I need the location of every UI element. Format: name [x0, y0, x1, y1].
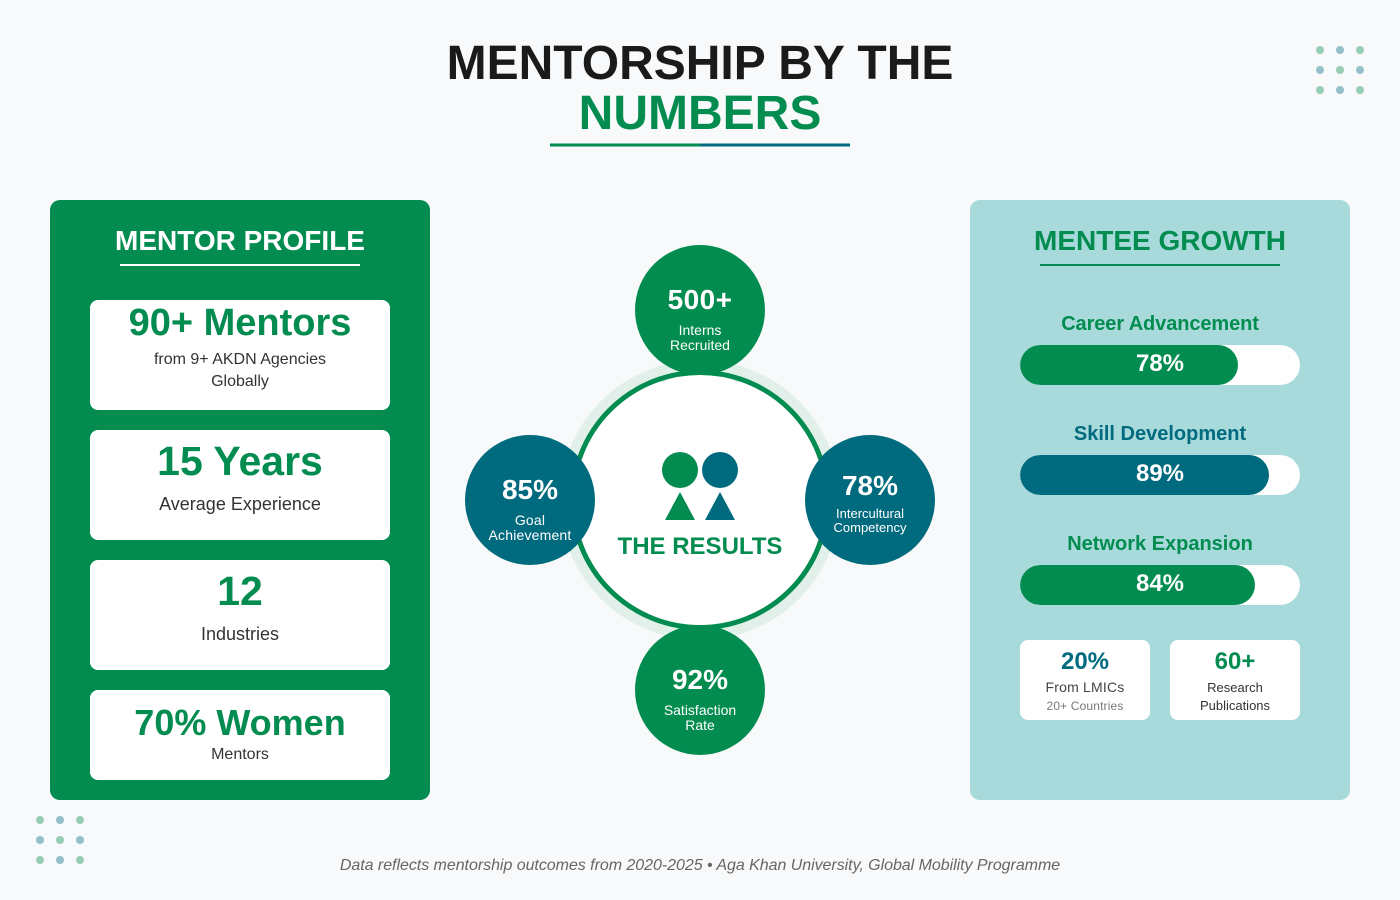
title underline — [550, 144, 850, 146]
mini description: Publications — [1200, 698, 1270, 713]
bar value: 78% — [1136, 350, 1184, 377]
metric: satisfaction — [635, 625, 765, 755]
stat card: years — [90, 430, 390, 540]
stat value: 15 Years — [157, 438, 323, 484]
mini card: research — [1170, 640, 1300, 720]
bar fill — [1020, 565, 1255, 605]
bar label: network expansion: Network Expansion — [1067, 533, 1253, 555]
panel: mentor profile — [50, 200, 430, 800]
bar: network expansion — [1020, 565, 1300, 605]
mini note: 20+ Countries — [1046, 699, 1124, 713]
bar: career advancement — [1020, 345, 1300, 385]
metric label: Rate — [685, 717, 715, 733]
metric label: Recruited — [670, 337, 730, 353]
metric label — [488, 512, 572, 543]
icon: two people — [662, 452, 738, 520]
title line one: MENTORSHIP BY THE — [447, 37, 953, 90]
mentee growth heading: MENTEE GROWTH — [1034, 225, 1286, 256]
stat description: Industries — [201, 624, 279, 644]
metric label: Achievement — [489, 527, 571, 543]
metric label: Intercultural — [836, 506, 904, 521]
metric value: 78% — [842, 470, 898, 501]
stat value: 12 — [217, 568, 263, 614]
metric label: Competency — [834, 520, 906, 535]
metric label — [664, 702, 736, 733]
metric label: Goal — [515, 512, 545, 528]
bar label: career advancement: Career Advancement — [1061, 313, 1259, 335]
mini description: Research — [1207, 680, 1263, 695]
metric label: Satisfaction — [664, 702, 736, 718]
stat value: 70% Women — [134, 702, 346, 743]
bar fill — [1020, 345, 1238, 385]
panel: mentee growth — [970, 200, 1350, 800]
metric value: 85% — [502, 474, 558, 505]
bar value: 84% — [1136, 570, 1184, 597]
bar value: 89% — [1136, 460, 1184, 487]
stat description — [154, 351, 326, 390]
mini description — [1200, 680, 1270, 713]
mini card: LMICs — [1020, 640, 1150, 720]
decoration: bottom left dots — [36, 816, 84, 864]
footer note: Data reflects mentorship outcomes from 2020-2025 • Aga Khan University, Global Mobility Programme — [340, 857, 1060, 874]
outer halo ring — [560, 360, 840, 640]
stat card: mentors — [90, 300, 390, 410]
title — [447, 37, 953, 146]
decoration: top right dots — [1316, 46, 1364, 94]
heading underline — [120, 264, 360, 266]
mentor profile heading: MENTOR PROFILE — [115, 225, 365, 256]
mini description: From LMICs — [1046, 679, 1124, 695]
stat description: from 9+ AKDN Agencies — [154, 351, 326, 368]
stat description: Globally — [211, 373, 269, 390]
centre label: THE RESULTS — [618, 533, 782, 560]
bar label: skill development: Skill Development — [1074, 423, 1246, 445]
heading underline — [1040, 264, 1280, 266]
bar fill — [1020, 455, 1269, 495]
title line two: NUMBERS — [579, 87, 821, 140]
metric label — [670, 322, 730, 353]
metric label — [834, 506, 906, 535]
mini value: 60+ — [1215, 648, 1255, 675]
centre circle — [570, 370, 830, 630]
mini value: 20% — [1061, 648, 1109, 675]
metric label: Interns — [679, 322, 721, 338]
stat description: Average Experience — [159, 494, 321, 514]
metric: goal achievement — [465, 435, 595, 565]
metric: intercultural competency — [805, 435, 935, 565]
stat value: 90+ Mentors — [129, 302, 351, 344]
diagram: the results — [465, 245, 935, 755]
stat card: industries — [90, 560, 390, 670]
bar: skill development — [1020, 455, 1300, 495]
metric: interns — [635, 245, 765, 375]
stat description: Mentors — [211, 746, 269, 763]
metric value: 500+ — [668, 284, 732, 315]
stat card: women — [90, 690, 390, 780]
metric value: 92% — [672, 664, 728, 695]
